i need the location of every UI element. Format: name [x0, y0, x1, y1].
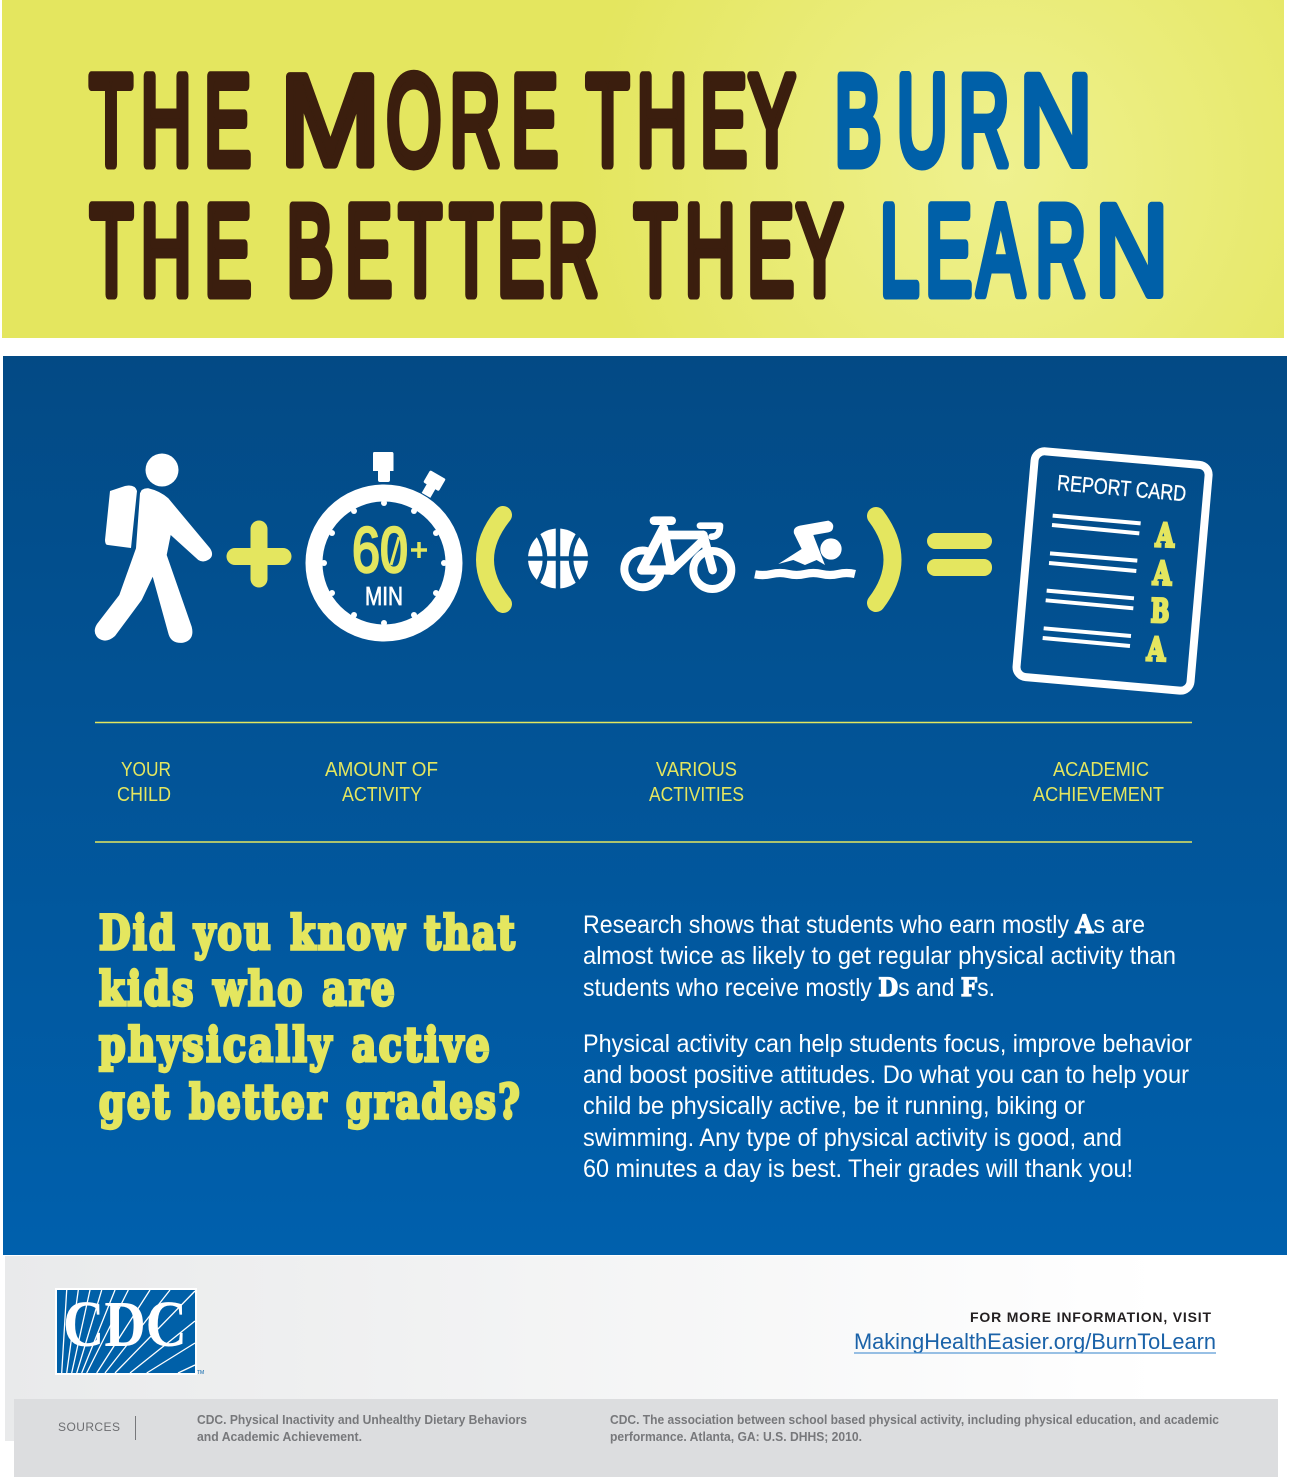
icon: stopwatch 60+ minutes: MIN	[365, 581, 403, 611]
text: physical activity paragraph: and boost positive attitudes. Do what you can to help your	[583, 1061, 1189, 1089]
title line 1: N	[1019, 50, 1092, 192]
icon: report card: A	[1154, 516, 1176, 555]
title line 1	[89, 48, 1092, 193]
left parenthesis	[485, 515, 503, 604]
equals sign	[927, 533, 992, 576]
heading: did you know: physically active	[99, 1018, 492, 1073]
source 1	[197, 1412, 527, 1444]
title line 1: ORE	[386, 48, 558, 192]
text: physical activity paragraph: Physical activity can help students focus, improve behavior	[583, 1030, 1192, 1058]
title line 2: THEY	[634, 178, 843, 322]
title line 1: BUR	[835, 48, 1009, 192]
title line 2: N	[1095, 180, 1168, 322]
icon: report card: REPORT CARD	[1056, 470, 1187, 506]
title line 2: THE	[90, 178, 251, 322]
title line 2: BETTER	[287, 178, 598, 322]
footer panel	[5, 1256, 1287, 1441]
heading: did you know: kids who are	[99, 962, 397, 1017]
more information: FOR MORE INFORMATION, VISIT	[970, 1309, 1211, 1325]
title line 1: THEY	[586, 48, 795, 192]
icon: bicycle	[624, 521, 731, 589]
source 2: performance. Atlanta, GA: U.S. DHHS; 2010.	[610, 1429, 862, 1444]
label: academic achievement	[1033, 759, 1164, 806]
heading: did you know: get better grades?	[99, 1075, 522, 1130]
text: physical activity paragraph	[583, 1030, 1192, 1183]
more information	[854, 1309, 1216, 1354]
icon: report card: A	[1152, 554, 1173, 593]
label: amount of activity: ACTIVITY	[342, 784, 422, 806]
text: research paragraph: Research shows that students who earn mostly As are	[583, 910, 1145, 939]
title line 1: THE	[89, 48, 251, 192]
icon: report card: B	[1150, 592, 1170, 630]
heading: did you know: Did you know that	[99, 906, 517, 961]
right parenthesis	[876, 516, 892, 603]
label: amount of activity	[325, 759, 438, 806]
label: various activities	[649, 759, 744, 806]
icon: child walking with backpack	[95, 454, 212, 643]
sources panel	[14, 1399, 1278, 1477]
CDC logo: TM	[197, 1370, 204, 1376]
source 2	[610, 1412, 1219, 1444]
text: physical activity paragraph: 60 minutes a day is best. Their grades will thank you!	[583, 1155, 1133, 1183]
icon: stopwatch 60+ minutes	[314, 452, 454, 633]
icon: report card: A	[1146, 630, 1167, 669]
label: your child: CHILD	[117, 784, 171, 806]
title line 2	[90, 178, 1168, 322]
CDC logo: CDC	[63, 1288, 187, 1361]
text: research paragraph: students who receive mostly Ds and Fs.	[583, 973, 995, 1002]
label: your child	[117, 759, 171, 806]
label: academic achievement: ACHIEVEMENT	[1033, 784, 1164, 806]
label: academic achievement: ACADEMIC	[1053, 759, 1149, 781]
title line 2: LEAR	[880, 178, 1086, 322]
text: physical activity paragraph: child be physically active, be it running, biking or	[583, 1092, 1085, 1120]
label: various activities: VARIOUS	[656, 759, 737, 781]
icon: report card	[1016, 450, 1209, 691]
label: various activities: ACTIVITIES	[649, 784, 744, 806]
text: research paragraph: almost twice as likely to get regular physical activity than	[583, 942, 1176, 970]
label: amount of activity: AMOUNT OF	[325, 759, 438, 781]
more information: MakingHealthEasier.org/BurnToLearn	[854, 1329, 1216, 1354]
source 1: and Academic Achievement.	[197, 1429, 362, 1444]
main blue panel	[3, 356, 1287, 1255]
text: research paragraph	[583, 910, 1176, 1002]
label: your child: YOUR	[121, 759, 171, 781]
source 1: CDC. Physical Inactivity and Unhealthy Dietary Behaviors	[197, 1412, 527, 1427]
icon: swimmer	[755, 521, 855, 575]
title line 1: M	[280, 50, 380, 193]
icon: basketball	[527, 527, 589, 590]
heading: did you know	[99, 906, 522, 1130]
icon: stopwatch 60+ minutes: 60	[352, 514, 408, 586]
source 2: CDC. The association between school based physical activity, including physical education, and academic	[610, 1412, 1219, 1427]
title banner	[2, 0, 1284, 338]
text: physical activity paragraph: swimming. Any type of physical activity is good, and	[583, 1124, 1122, 1152]
icon: plus sign	[235, 529, 283, 579]
sources label: SOURCES	[58, 1420, 120, 1434]
